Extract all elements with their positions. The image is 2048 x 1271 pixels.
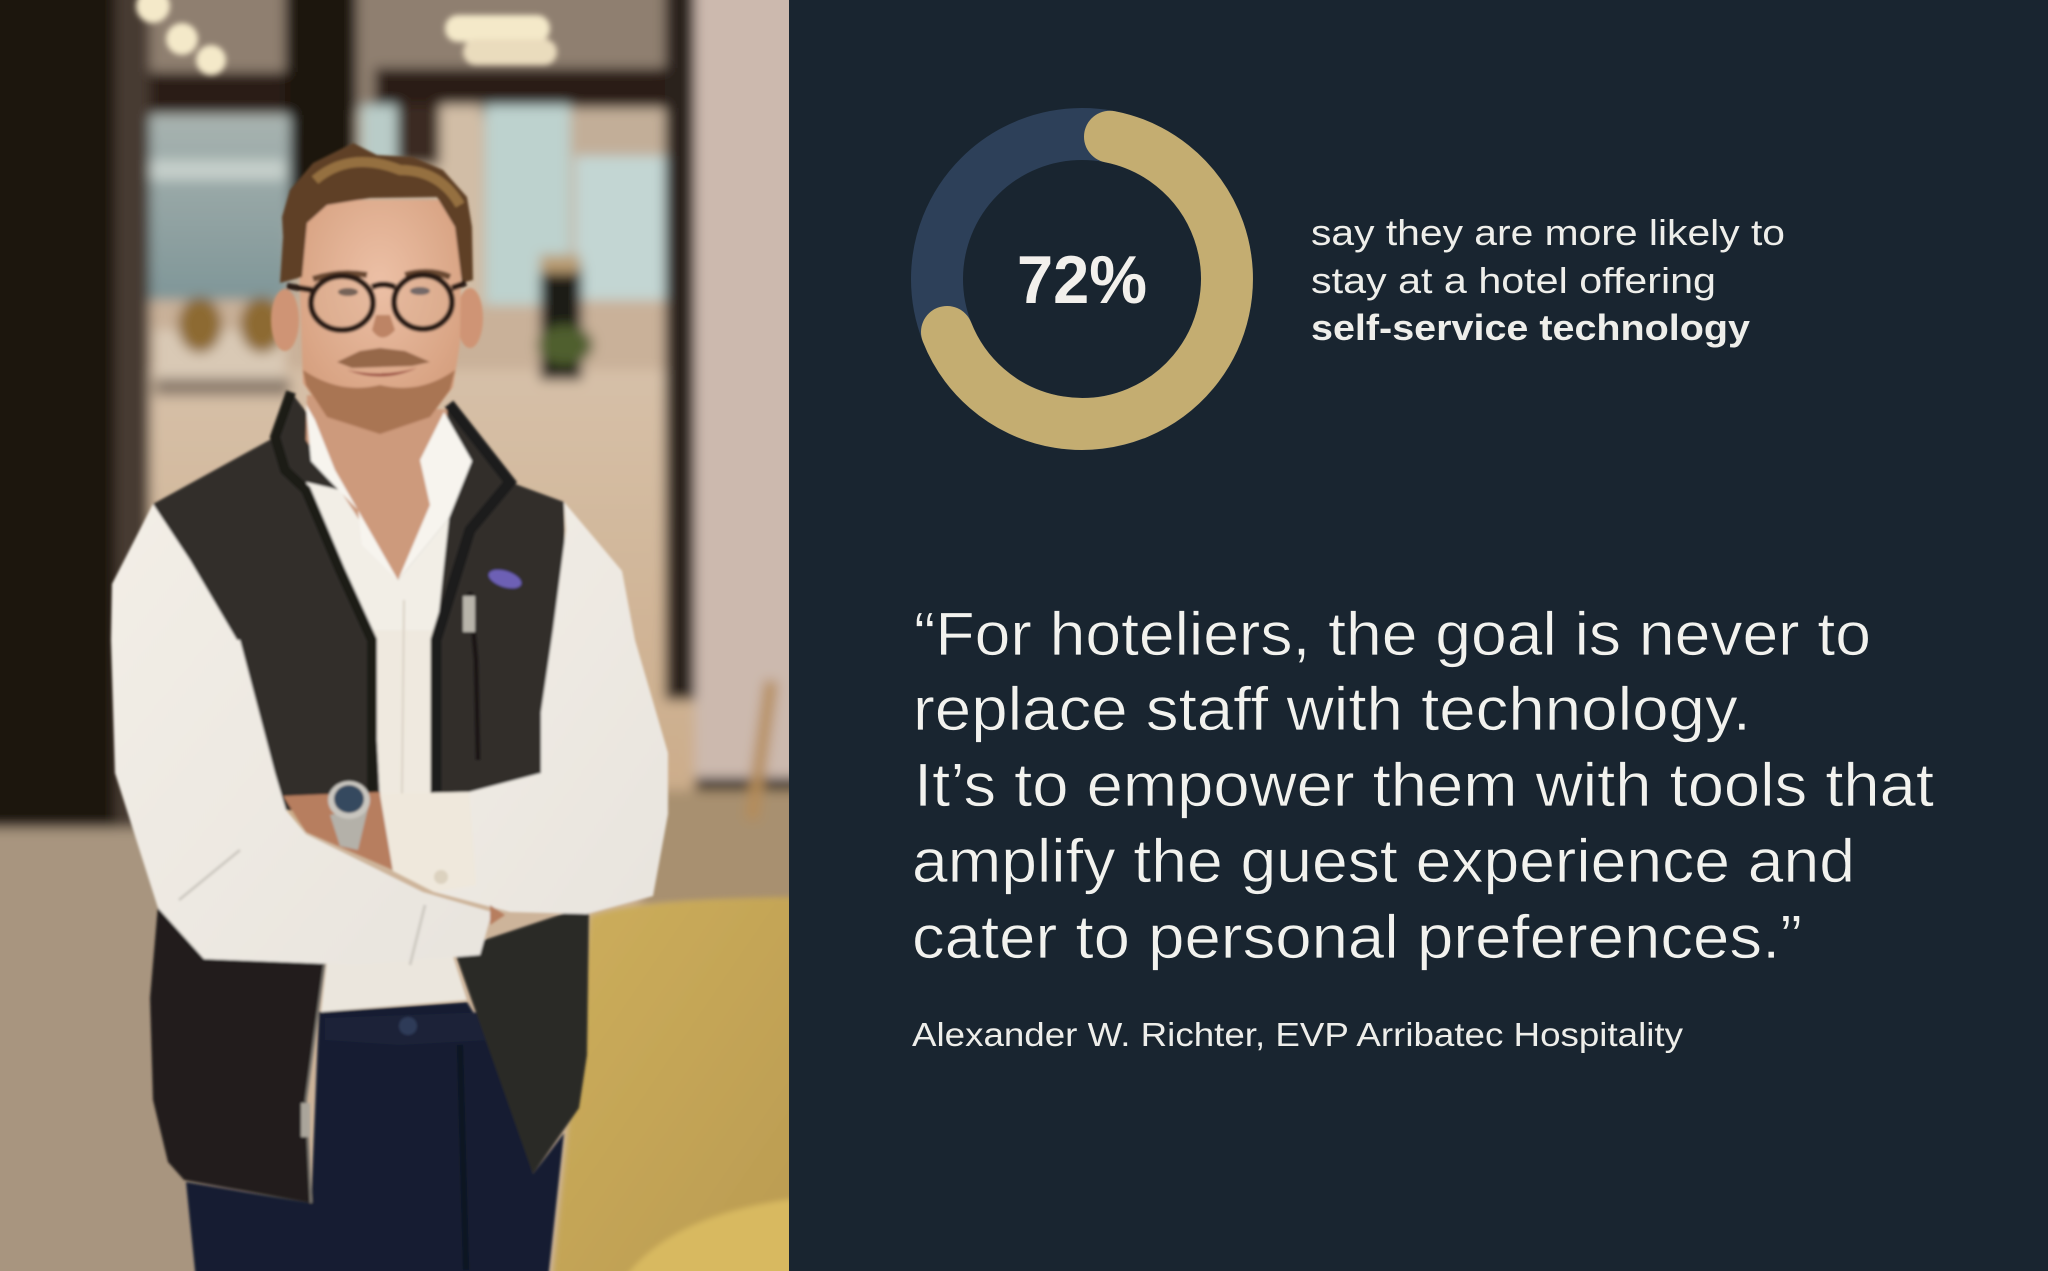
zipper	[306, 960, 325, 1203]
man in vest, arms crossed	[111, 143, 668, 1271]
left-side sleeve	[111, 504, 492, 965]
chest zipper and logo	[470, 592, 478, 760]
ceiling lights	[136, 0, 557, 75]
donut chart: 72%	[937, 134, 1227, 424]
quote text: cater to personal preferences.”	[912, 903, 1802, 971]
quote text	[912, 600, 1934, 971]
trousers	[186, 1002, 564, 1271]
hand and wrist	[283, 792, 393, 870]
wristwatch	[328, 781, 370, 850]
ring track	[937, 134, 1227, 424]
quote text: “For hoteliers, the goal is never to	[914, 600, 1871, 668]
blurred office background	[0, 0, 840, 1271]
yellow armchair	[550, 896, 789, 1271]
panel: dark navy background	[789, 0, 2048, 1271]
percentage value: 72%	[1017, 242, 1147, 318]
stat description text	[1311, 212, 1785, 348]
head	[271, 143, 483, 434]
quote attribution: Alexander W. Richter, EVP Arribatec Hospitality	[912, 1017, 1683, 1054]
eyes	[338, 288, 358, 296]
stat description text: stay at a hotel offering	[1311, 260, 1716, 301]
quote text: It’s to empower them with tools that	[914, 751, 1934, 819]
collar	[306, 404, 398, 580]
ring value arc	[947, 137, 1227, 424]
vest lower left	[150, 905, 327, 1203]
moustache	[337, 348, 430, 368]
shirt lower	[321, 950, 467, 1012]
glasses	[287, 275, 466, 330]
panel: portrait photo	[0, 0, 840, 1271]
eyebrows	[313, 272, 450, 279]
vest lower right	[454, 905, 589, 1174]
nose shadow	[372, 315, 395, 338]
trouser button and loops	[397, 1010, 480, 1270]
right-side sleeve	[434, 501, 670, 916]
vest upper	[153, 392, 566, 810]
stat description text: self-service technology	[1311, 307, 1750, 348]
stat description text: say they are more likely to	[1311, 212, 1785, 253]
hair	[280, 143, 473, 283]
beard	[303, 370, 455, 434]
quote text: amplify the guest experience and	[912, 827, 1855, 895]
neck	[306, 395, 449, 580]
vest collar edges	[275, 392, 372, 800]
quote text: replace staff with technology.	[913, 675, 1751, 743]
shirt placket	[306, 482, 449, 800]
